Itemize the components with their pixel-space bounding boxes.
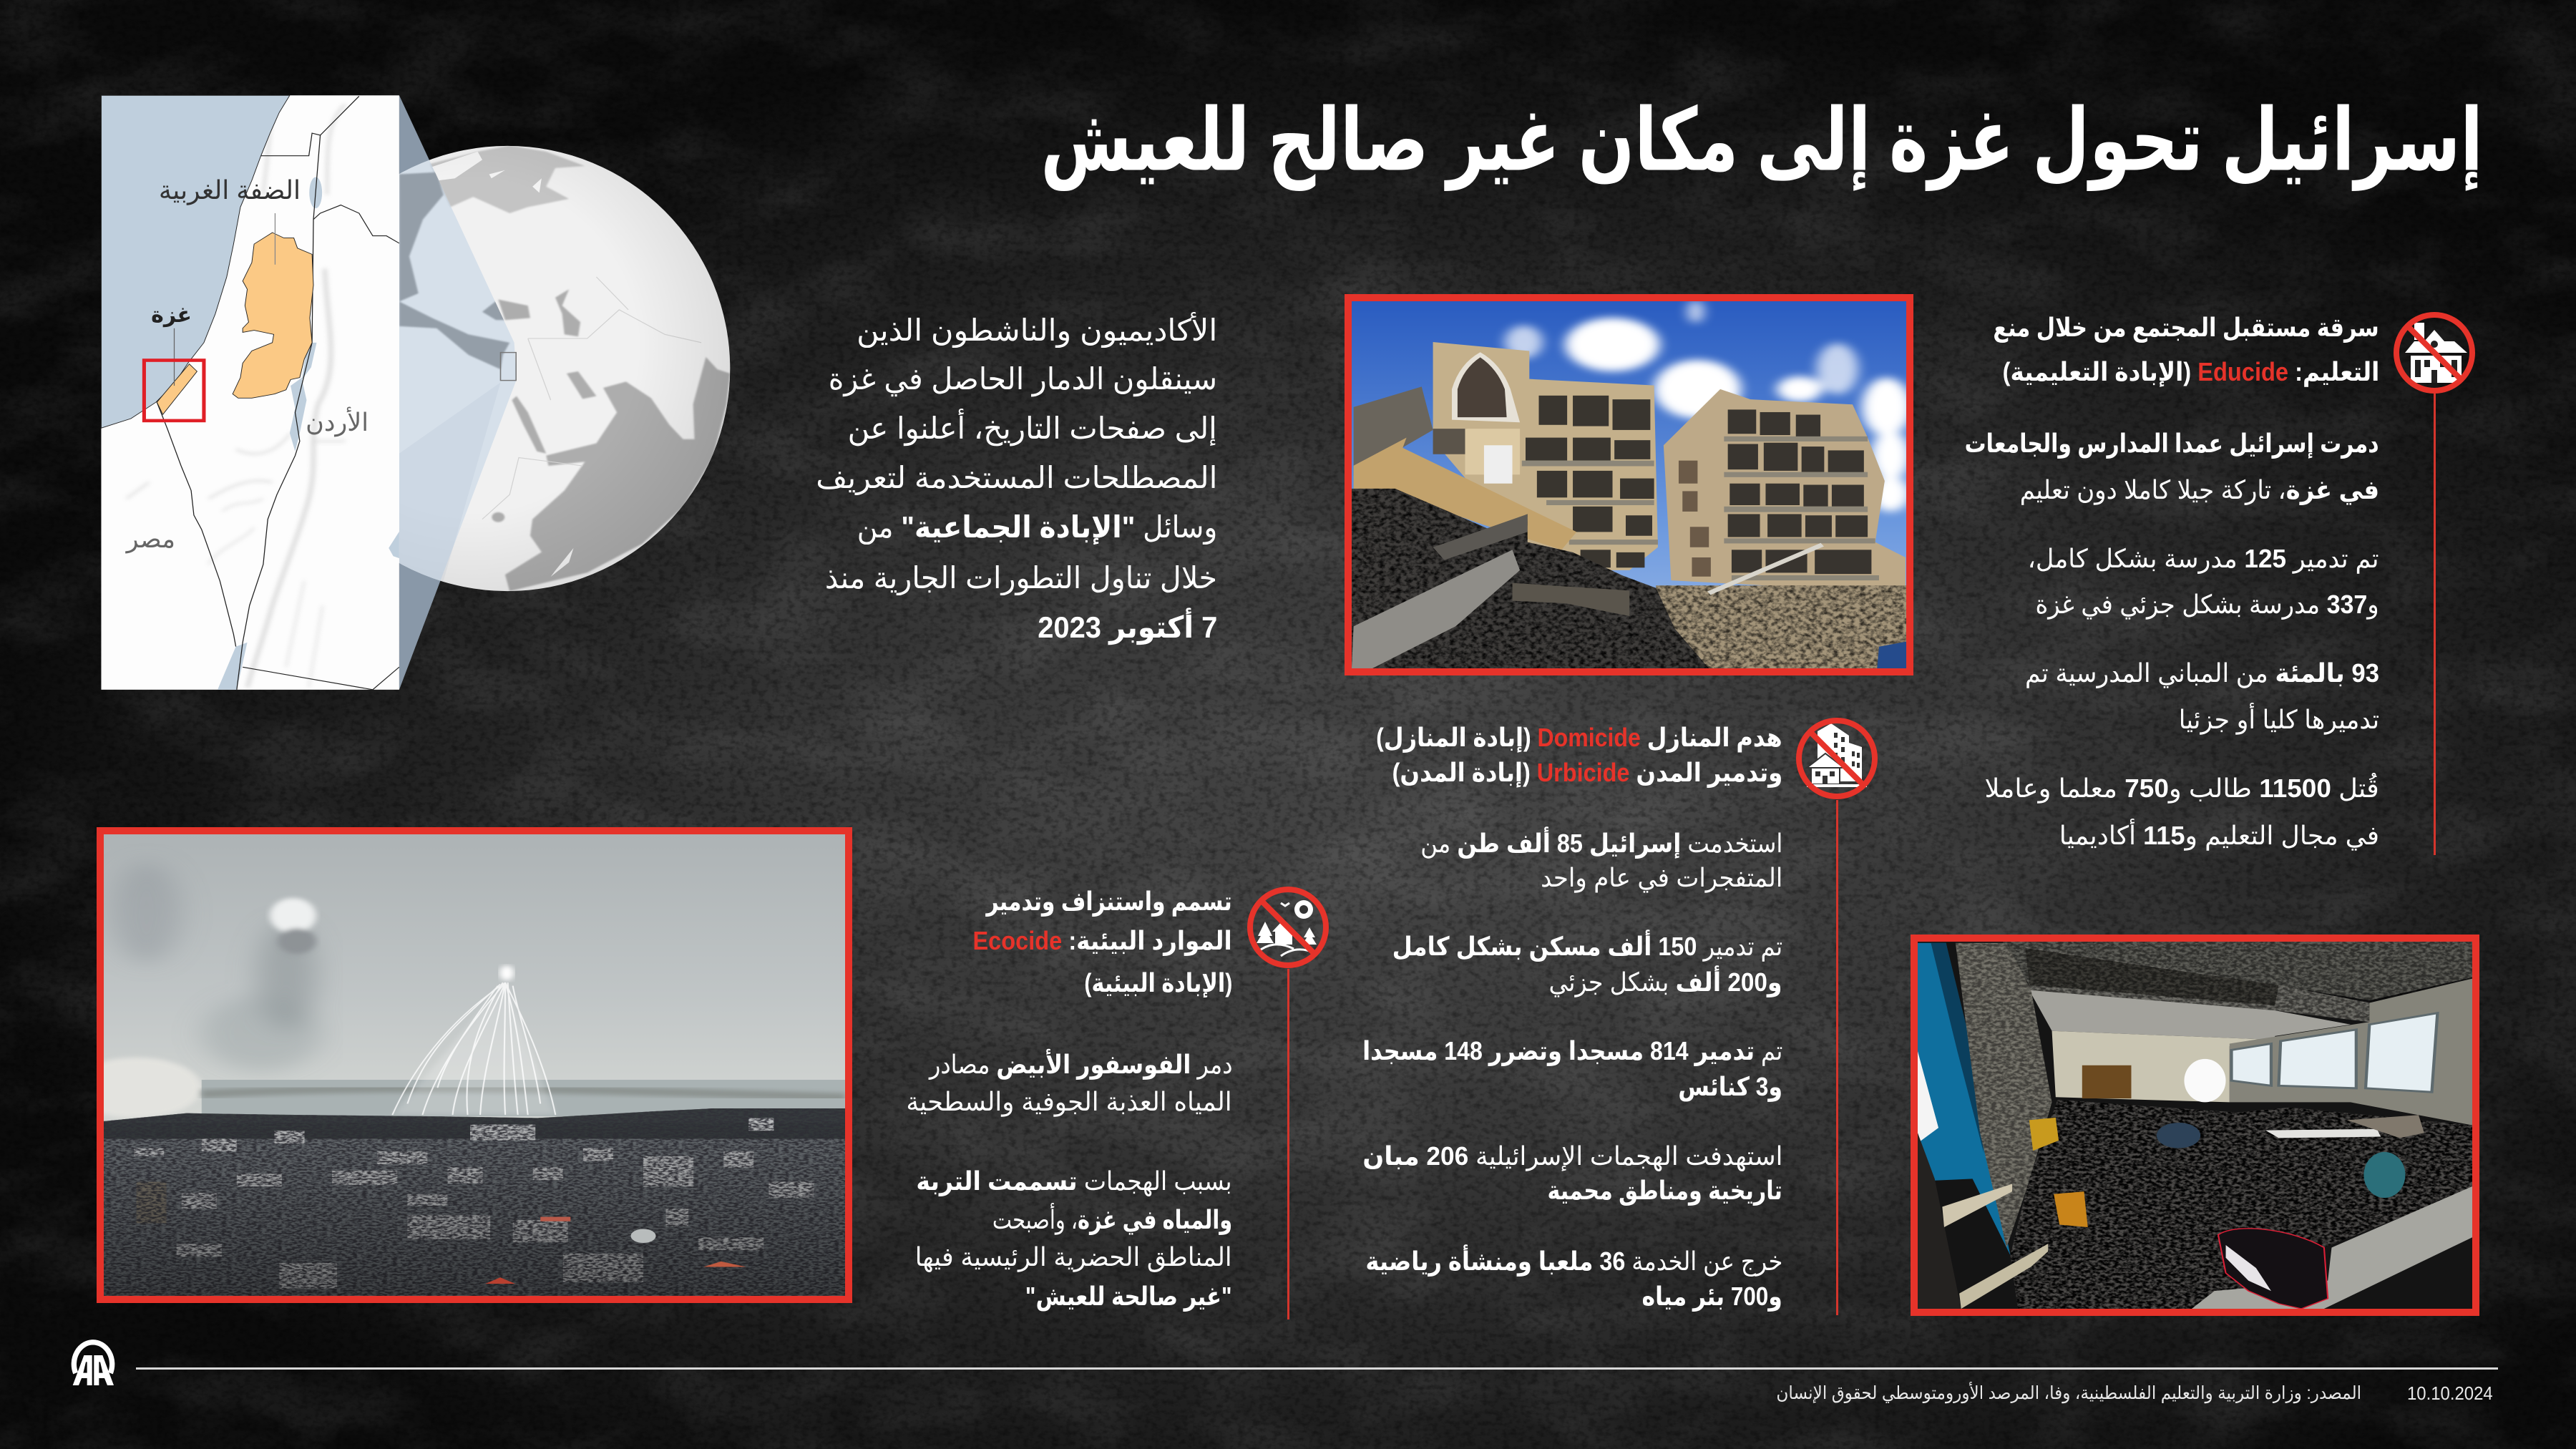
icon: no school bbox=[2394, 312, 2475, 394]
intro paragraph: سينقلون الدمار الحاصل في غزة bbox=[829, 362, 1217, 396]
domicide text: و3 كنائس bbox=[1678, 1072, 1782, 1101]
right wall bbox=[2230, 979, 2472, 1125]
intro paragraph: المصطلحات المستخدمة لتعريف bbox=[816, 461, 1217, 494]
domicide text bbox=[1362, 723, 1782, 1312]
right building bbox=[1664, 389, 1906, 593]
phosphorus streaks bbox=[392, 982, 555, 1115]
section: educide bbox=[1965, 312, 2475, 855]
educide text: 93 بالمئة من المباني المدرسية تم bbox=[2025, 658, 2379, 688]
domicide text: هدم المنازل Domicide (إبادة المنازل) bbox=[1376, 723, 1782, 751]
gaza highlight box bbox=[144, 361, 204, 421]
date: 10.10.2024 bbox=[2407, 1382, 2493, 1404]
sea bbox=[101, 95, 290, 428]
locator map with globe bbox=[101, 95, 730, 690]
gaza strip bbox=[157, 364, 197, 414]
ecocide text bbox=[907, 887, 1232, 1312]
connector line bbox=[1287, 969, 1289, 1319]
smoke bbox=[112, 862, 322, 1072]
educide text: و337 مدرسة بشكل جزئي في غزة bbox=[2036, 590, 2379, 619]
educide text: تدميرها كليا أو جزئيا bbox=[2179, 705, 2379, 734]
intro paragraph: الأكاديميون والناشطون الذين bbox=[857, 313, 1217, 346]
educide text: التعليم: Educide (الإبادة التعليمية) bbox=[2002, 357, 2379, 386]
connector line bbox=[1836, 800, 1838, 1315]
ecocide text: الموارد البيئية: Ecocide bbox=[973, 926, 1232, 955]
domicide text: و200 ألف بشكل جزئي bbox=[1549, 967, 1782, 997]
globe bbox=[399, 146, 730, 591]
windows bbox=[2231, 1013, 2437, 1092]
label: gaza: غزة bbox=[151, 303, 192, 327]
educide text: قُتل 11500 طالب و750 معلما وعاملا bbox=[1985, 774, 2379, 803]
educide text: تم تدمير 125 مدرسة بشكل كامل، bbox=[2028, 544, 2379, 573]
domicide text: تم تدمير 150 ألف مسكن بشكل كامل bbox=[1392, 932, 1782, 961]
domicide text: استخدمت إسرائيل 85 ألف طن من bbox=[1420, 829, 1782, 858]
footer rule bbox=[136, 1367, 2498, 1370]
intro paragraph: إلى صفحات التاريخ، أعلنوا عن bbox=[848, 411, 1217, 445]
objects bbox=[2029, 1118, 2059, 1151]
ecocide text: (الإبادة البيئية) bbox=[1084, 967, 1232, 997]
left wall bbox=[1956, 943, 2052, 1248]
red rooftops bbox=[485, 1277, 515, 1284]
educide text: في مجال التعليم و115 أكاديميا bbox=[2059, 821, 2379, 850]
ceiling bbox=[1957, 942, 2472, 1000]
section: domicide and urbicide bbox=[1362, 718, 1878, 1315]
domicide text: تاريخية ومناطق محمية bbox=[1548, 1176, 1782, 1205]
back wall bbox=[2052, 1031, 2275, 1102]
photo: destroyed apartment buildings bbox=[1345, 294, 1913, 675]
label: west bank: الضفة الغربية bbox=[159, 175, 301, 205]
section: ecocide bbox=[907, 887, 1329, 1319]
concrete ledge bbox=[2192, 1186, 2472, 1309]
title: إسرائيل تحول غزة إلى مكان غير صالح للعيش bbox=[1040, 92, 2483, 188]
tan slab bbox=[1354, 438, 1576, 550]
debris bbox=[2010, 1100, 2472, 1309]
leader lines bbox=[274, 213, 275, 265]
logo: AA bbox=[72, 1340, 114, 1385]
intro paragraph: خلال تناول التطورات الجارية منذ bbox=[825, 561, 1217, 595]
inland water bbox=[218, 177, 399, 690]
domicide text: المتفجرات في عام واحد bbox=[1541, 863, 1782, 892]
domicide text: خرج عن الخدمة 36 ملعبا ومنشأة رياضية bbox=[1365, 1246, 1782, 1276]
photo: burnt classroom bbox=[1911, 935, 2479, 1316]
source note: المصدر: وزارة التربية والتعليم الفلسطينية، وفا، المرصد الأورومتوسطي لحقوق الإنسان bbox=[1776, 1383, 2361, 1403]
debris right bbox=[1656, 585, 1906, 668]
globe location marker bbox=[500, 353, 516, 381]
terrain shading bbox=[127, 104, 346, 688]
label: egypt: مصر bbox=[127, 525, 175, 553]
cone overlay on globe bbox=[399, 160, 516, 581]
educide text: في غزة، تاركة جيلا كاملا دون تعليم bbox=[2020, 475, 2379, 504]
cone connecting globe to map bbox=[399, 95, 517, 690]
dark rubble bbox=[1352, 489, 1709, 668]
icon: no environment bbox=[1247, 887, 1329, 968]
icon: no homes bbox=[1796, 718, 1878, 799]
intro paragraph: 7 أكتوبر 2023 bbox=[1038, 610, 1217, 644]
ecocide text: تسمم واستنزاف وتدمير bbox=[987, 887, 1232, 916]
intro paragraph: وسائل "الإبادة الجماعية" من bbox=[857, 510, 1217, 544]
ecocide text: "غير صالحة للعيش" bbox=[1025, 1281, 1232, 1311]
left building bbox=[1433, 342, 1658, 570]
ecocide text: والمياه في غزة، وأصبحت bbox=[992, 1205, 1232, 1234]
ecocide text: المياه العذبة الجوفية والسطحية bbox=[907, 1087, 1232, 1116]
domicide text: تم تدمير 814 مسجدا وتضرر 148 مسجدا bbox=[1362, 1036, 1782, 1065]
domicide text: و700 بئر مياه bbox=[1642, 1282, 1782, 1311]
label: jordan: الأردن bbox=[306, 409, 369, 436]
educide text: سرقة مستقبل المجتمع من خلال منع bbox=[1994, 312, 2379, 342]
blue door bbox=[1918, 943, 2010, 1255]
west bank bbox=[233, 233, 313, 398]
domicide text: استهدفت الهجمات الإسرائيلية 206 مبان bbox=[1362, 1141, 1782, 1171]
bundle bbox=[2218, 1229, 2328, 1309]
educide text bbox=[1965, 312, 2379, 851]
ecocide text: دمر الفوسفور الأبيض مصادر bbox=[929, 1050, 1232, 1079]
map panel bbox=[101, 95, 399, 690]
connector line bbox=[2433, 394, 2436, 855]
ecocide text: المناطق الحضرية الرئيسية فيها bbox=[915, 1242, 1232, 1272]
intro paragraph bbox=[816, 312, 1217, 645]
educide text: دمرت إسرائيل عمدا المدارس والجامعات bbox=[1965, 429, 2379, 458]
photo: white phosphorus over gaza city bbox=[97, 827, 852, 1303]
domicide text: وتدمير المدن Urbicide (إبادة المدن) bbox=[1392, 758, 1782, 787]
horizon bbox=[202, 1080, 845, 1116]
city bbox=[104, 1108, 845, 1296]
ecocide text: بسبب الهجمات تسممت التربة bbox=[917, 1166, 1232, 1196]
borders bbox=[157, 96, 399, 690]
